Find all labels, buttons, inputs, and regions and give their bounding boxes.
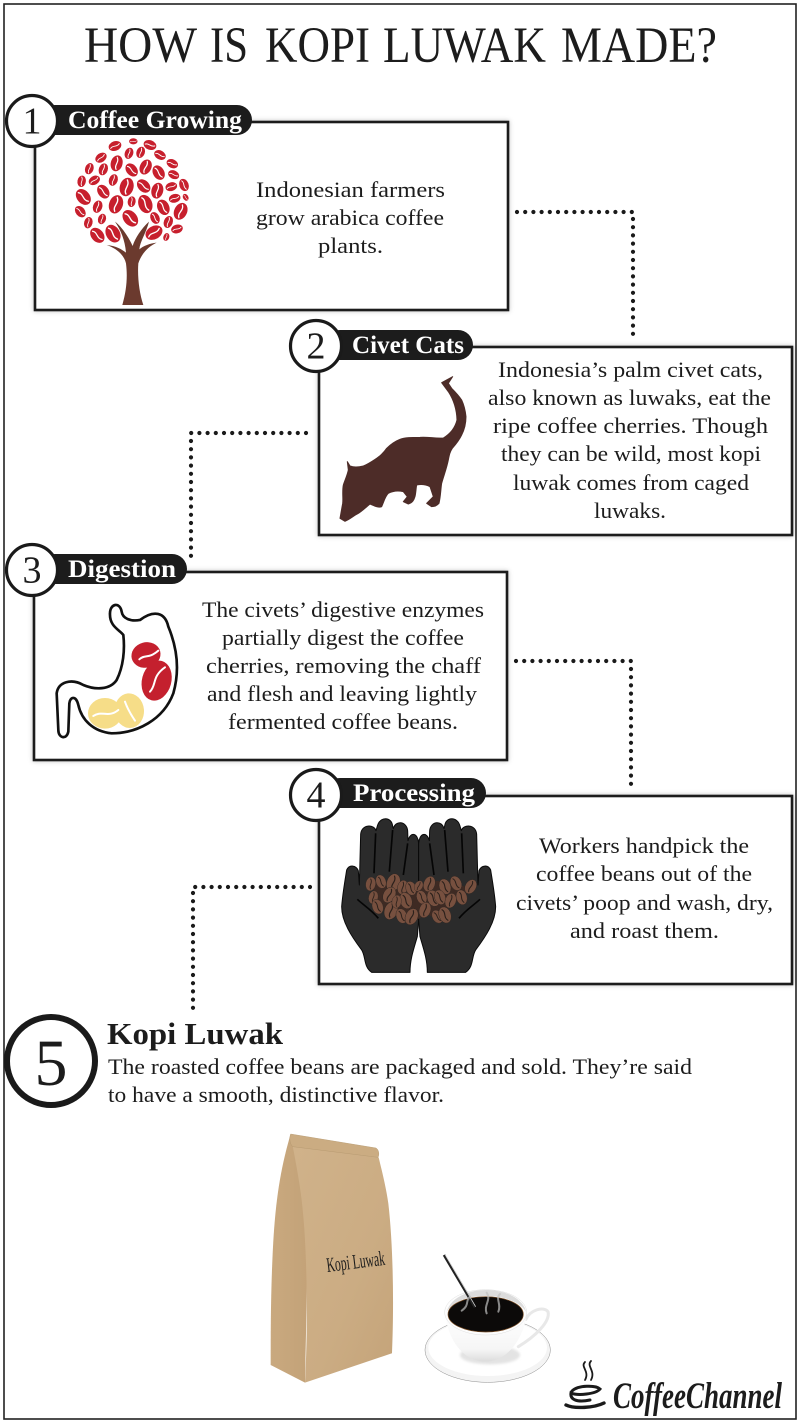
description: cherries, removing the chaff <box>206 653 482 678</box>
panel frame <box>35 122 508 310</box>
illustration: kraft coffee bag: Kopi Luwak <box>325 1248 387 1277</box>
heading: Civet Cats <box>352 332 464 359</box>
title: KOPI <box>265 18 370 74</box>
connector: step 1 to step 2 <box>517 212 633 341</box>
illustration: coffee cup on saucer <box>425 1255 550 1382</box>
icon: steaming cup <box>566 1361 604 1407</box>
icon: civet silhouette <box>340 377 466 521</box>
number badge: 1 <box>22 100 42 142</box>
step 5: kopi luwak <box>7 1016 692 1107</box>
panel frame <box>319 347 792 535</box>
title <box>84 18 717 74</box>
panel: processing <box>290 770 792 984</box>
panel frame <box>34 572 507 760</box>
description: they can be wild, most kopi <box>501 441 761 466</box>
title: IS <box>210 18 248 74</box>
number badge <box>6 544 58 596</box>
connector: step 2 to step 3 <box>191 433 306 559</box>
description: The roasted coffee beans are packaged and sold. They’re said <box>108 1054 692 1079</box>
heading: Coffee Growing <box>68 107 242 134</box>
description: luwaks. <box>594 498 666 523</box>
logo: coffee channel <box>566 1361 783 1417</box>
number badge <box>290 320 342 372</box>
number badge <box>290 770 342 820</box>
heading pill <box>325 330 473 360</box>
number badge: 3 <box>22 550 42 592</box>
description: luwak comes from caged <box>513 470 749 495</box>
icon: coffee bean tree <box>73 138 190 305</box>
description: partially digest the coffee <box>222 625 464 650</box>
description: and flesh and leaving lightly <box>207 681 478 706</box>
icon: stomach with beans <box>57 605 177 737</box>
description: ripe coffee cherries. Though <box>493 413 768 438</box>
description <box>516 833 773 943</box>
description: fermented coffee beans. <box>228 709 458 734</box>
heading pill <box>40 554 187 584</box>
panel: civet cats <box>290 320 792 535</box>
description: coffee beans out of the <box>536 861 752 886</box>
number badge: 4 <box>306 774 326 816</box>
description: to have a smooth, distinctive flavor. <box>108 1082 444 1107</box>
panel frame <box>319 796 792 984</box>
number badge: 5 <box>34 1027 68 1100</box>
connector: step 4 to step 5 <box>193 887 310 1015</box>
description: also known as luwaks, eat the <box>488 385 771 410</box>
heading pill <box>325 778 486 808</box>
description <box>488 357 771 523</box>
description <box>256 177 445 258</box>
title: LUWAK <box>383 18 546 74</box>
description: grow arabica coffee <box>256 205 444 230</box>
number badge <box>7 1017 95 1105</box>
title: MADE? <box>561 18 717 74</box>
icon: gloved hands holding beans <box>342 819 496 972</box>
heading: Kopi Luwak <box>107 1016 284 1051</box>
number badge: 2 <box>306 326 326 368</box>
description <box>202 597 484 734</box>
description: Indonesia’s palm civet cats, <box>498 357 763 382</box>
number badge <box>6 96 58 146</box>
description: Indonesian farmers <box>256 177 445 202</box>
description: and roast them. <box>570 918 719 943</box>
heading pill <box>40 105 252 135</box>
description: Workers handpick the <box>539 833 749 858</box>
description: plants. <box>318 233 383 258</box>
heading: Digestion <box>68 556 176 583</box>
illustration: kraft coffee bag <box>271 1134 393 1383</box>
heading: Processing <box>353 780 476 807</box>
panel: coffee growing <box>6 96 508 310</box>
title: HOW <box>84 18 198 74</box>
description: The civets’ digestive enzymes <box>202 597 484 622</box>
description: civets’ poop and wash, dry, <box>516 890 773 915</box>
connector: step 3 to step 4 <box>516 661 631 790</box>
description <box>108 1054 692 1107</box>
panel: digestion <box>6 544 507 760</box>
